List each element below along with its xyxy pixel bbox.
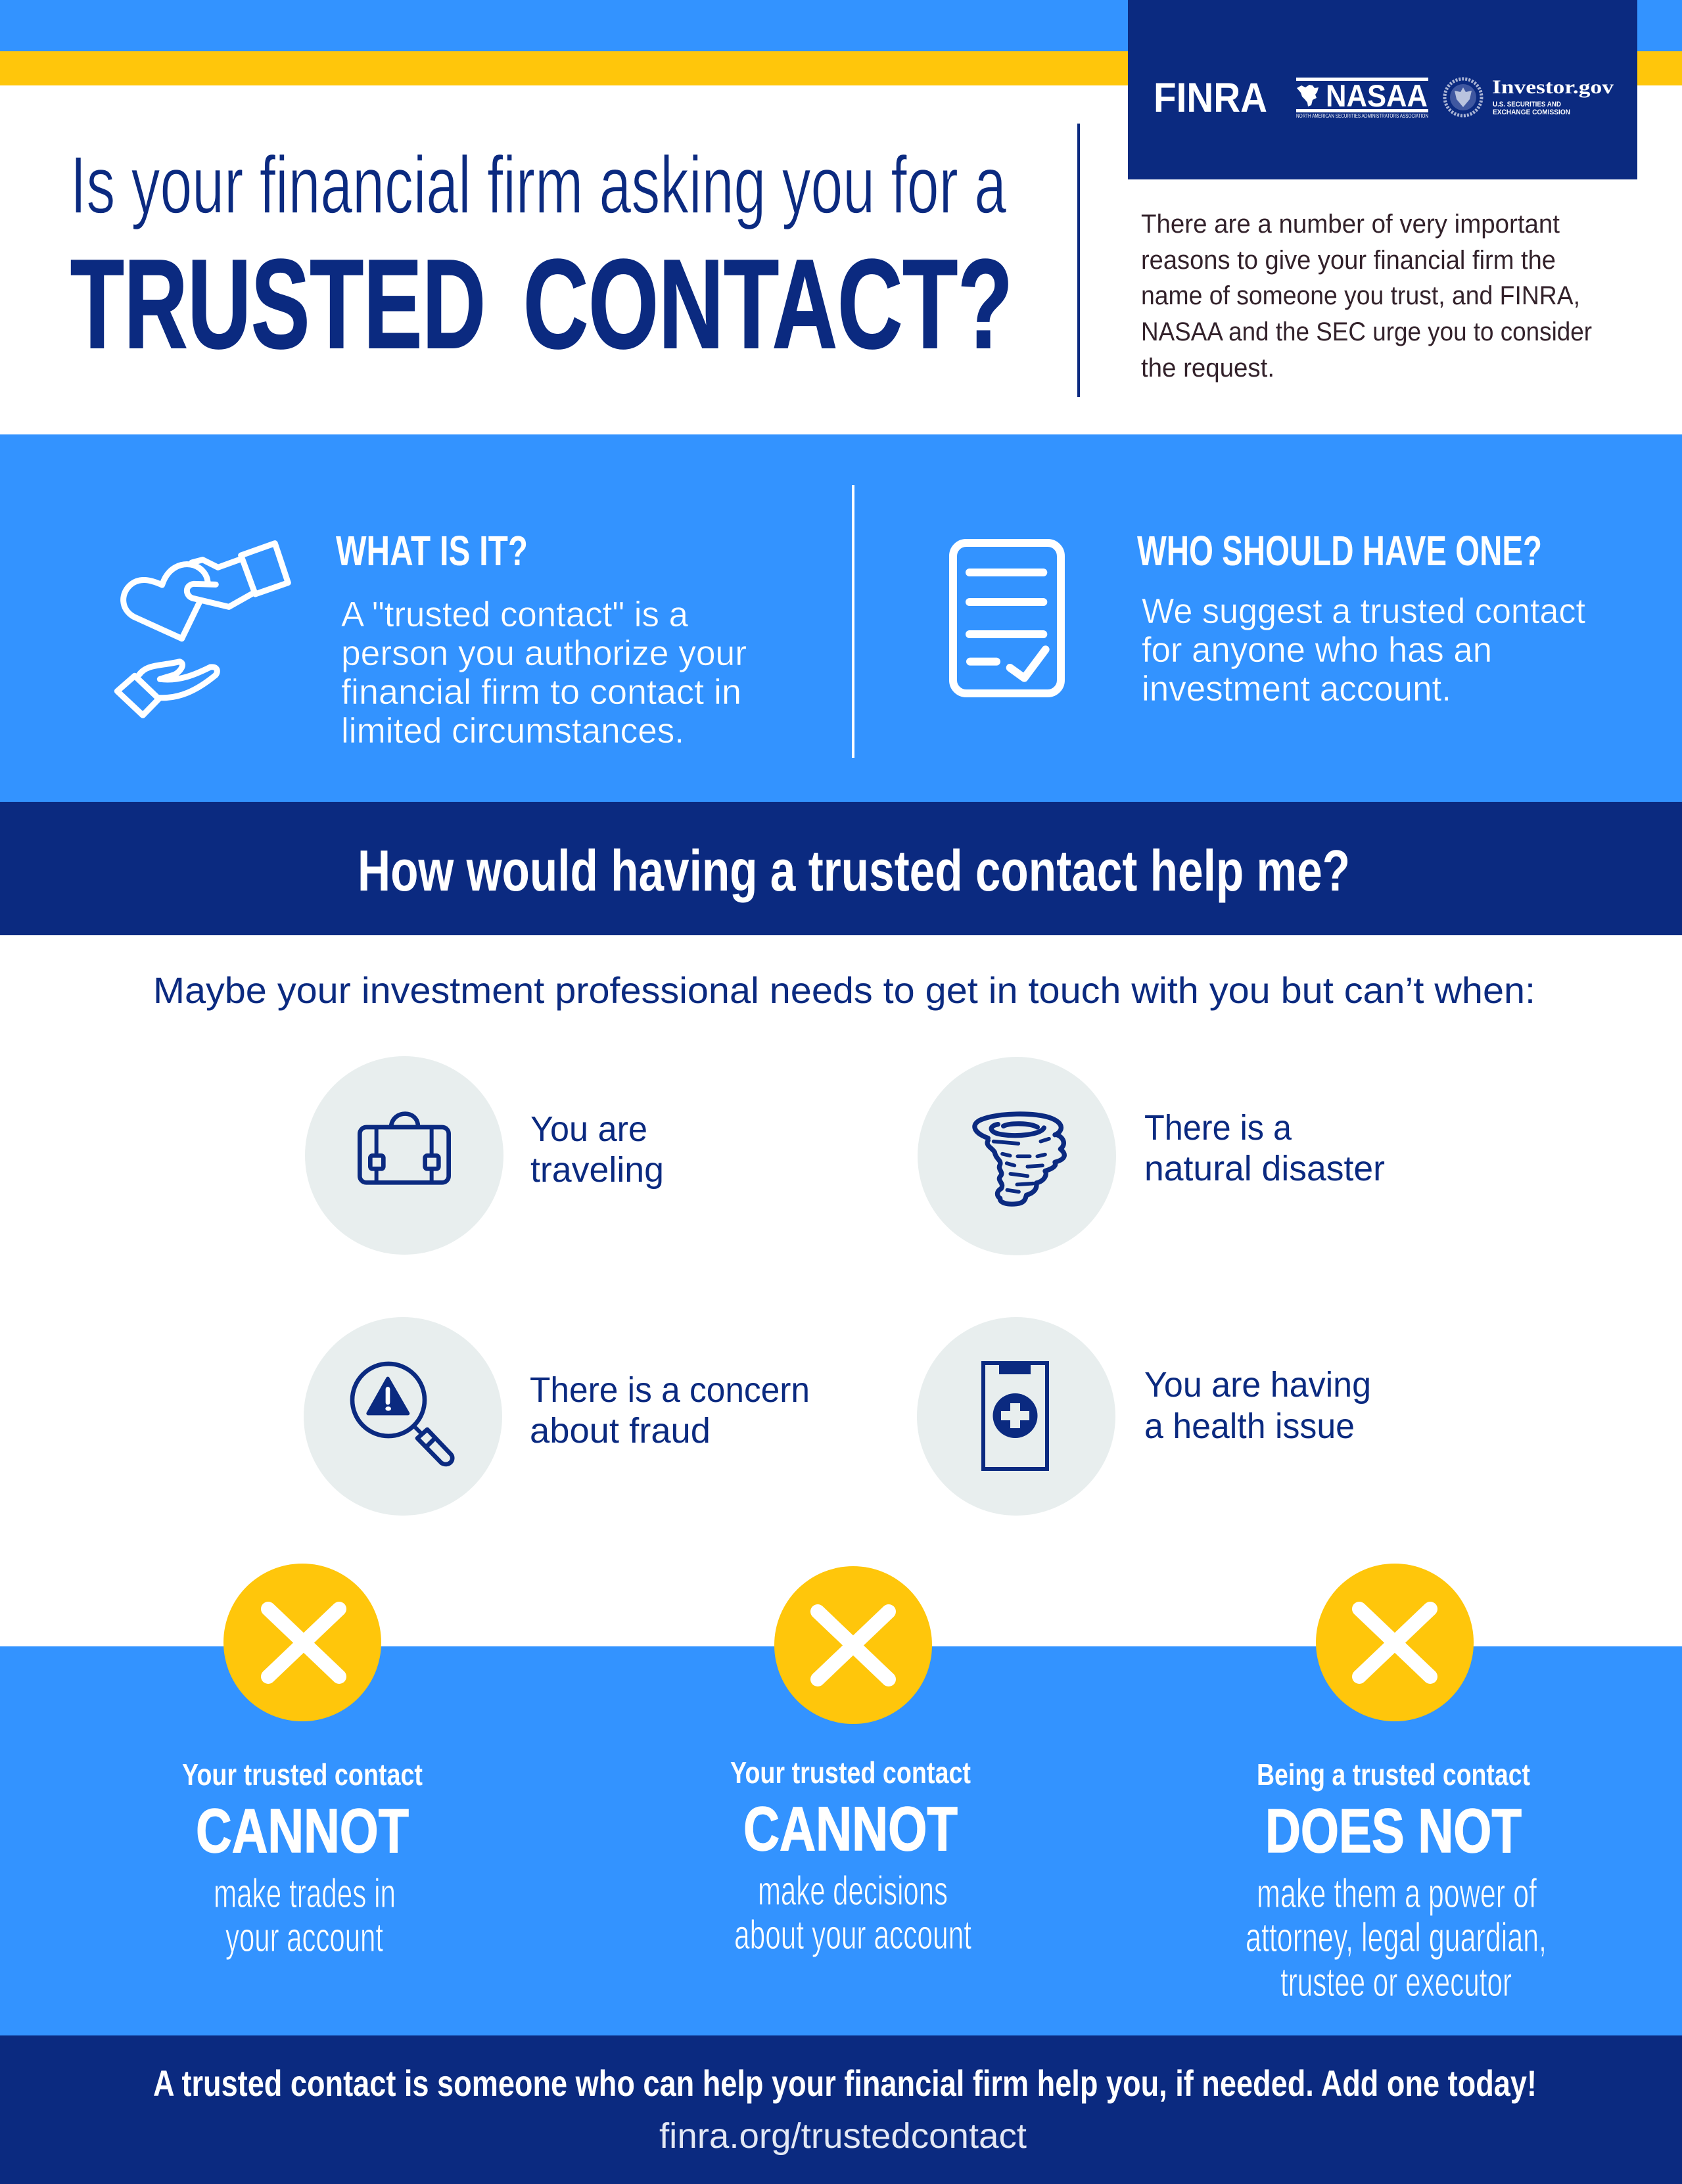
text block: who should have one <box>1137 527 1585 709</box>
text: you are traveling <box>530 1109 664 1190</box>
text: health issue: a health issue <box>1144 1406 1355 1446</box>
column: does not make them power of attorney: Being a trusted contact <box>1257 1757 1530 1792</box>
intro paragraph: There are a number of very important <box>1141 210 1560 239</box>
text: health issue: You are having <box>1144 1365 1371 1405</box>
footer url: finra.org/trustedcontact <box>659 2116 1027 2156</box>
text block: what is it: limited circumstances. <box>341 711 684 751</box>
column: cannot make decisions: Your trusted contact <box>730 1755 971 1790</box>
icon: tornado <box>975 1114 1064 1204</box>
text block: what is it: financial firm to contact in <box>341 672 741 712</box>
intro paragraph <box>1141 210 1592 383</box>
logo: NASAA: NASAA <box>1326 78 1428 113</box>
text: natural disaster: There is a <box>1144 1108 1292 1148</box>
header divider <box>1077 124 1080 397</box>
intro paragraph: reasons to give your financial firm the <box>1141 246 1556 275</box>
logo: FINRA: FINRA <box>1154 75 1267 121</box>
icon: checklist document <box>953 543 1061 693</box>
text block: what is it <box>336 527 747 751</box>
panel: what is it / who should have one <box>0 434 1682 802</box>
logo: Investor.gov <box>1492 76 1614 116</box>
logo: NASAA: NORTH AMERICAN SECURITIES ADMINISTRATORS ASSOCIATION <box>1296 113 1428 119</box>
text block: what is it: A "trusted contact" is a <box>341 595 689 634</box>
title: CONTACT? <box>523 233 1013 375</box>
column: cannot make trades <box>182 1564 423 1961</box>
intro paragraph: name of someone you trust, and FINRA, <box>1141 281 1580 310</box>
logo: NASAA <box>1296 78 1428 119</box>
heading band: how would it help <box>0 802 1682 935</box>
column: cannot make trades: CANNOT <box>196 1796 409 1866</box>
text: natural disaster: natural disaster <box>1144 1149 1385 1188</box>
column: cannot make decisions: CANNOT <box>743 1794 958 1864</box>
column: cannot make trades: Your trusted contact <box>182 1757 423 1792</box>
logo: Investor.gov: Investor.gov <box>1492 76 1614 98</box>
intro paragraph: NASAA and the SEC urge you to consider <box>1141 317 1592 346</box>
icon: yellow x <box>1316 1564 1474 1721</box>
title: Is your financial firm asking you for a <box>70 141 1006 231</box>
item: natural disaster <box>918 1057 1385 1255</box>
title: TRUSTED <box>70 233 486 375</box>
logo: Investor.gov: EXCHANGE COMISSION <box>1493 108 1570 116</box>
text: you are traveling: You are <box>530 1109 647 1149</box>
text: you are traveling: traveling <box>530 1150 664 1190</box>
icon: magnifier with warning <box>352 1364 452 1464</box>
text block: who should have one: for anyone who has an <box>1142 630 1492 670</box>
title <box>70 141 1013 375</box>
item: concern about fraud <box>304 1317 810 1516</box>
intro paragraph: the request. <box>1141 354 1274 383</box>
logo: Investor.gov: U.S. SECURITIES AND <box>1493 101 1561 108</box>
text: concern about fraud: about fraud <box>530 1411 711 1451</box>
column: does not make them power of attorney <box>1246 1564 1547 2005</box>
icon: briefcase <box>360 1114 449 1182</box>
item: traveling <box>305 1056 664 1255</box>
icon: hands passing a heart <box>117 544 288 715</box>
column: cannot make decisions: about your account <box>734 1913 971 1958</box>
heading band: how would it help: How would having a trusted contact help me? <box>358 838 1350 903</box>
column: cannot make trades: make trades in <box>214 1871 396 1917</box>
top header bands <box>0 0 1682 85</box>
text: health issue <box>1144 1365 1371 1446</box>
column: cannot make decisions <box>730 1566 971 1958</box>
logo: SEC seal <box>1445 79 1482 116</box>
text block: who should have one: investment account. <box>1142 669 1451 709</box>
column: does not make them power of attorney: attorney, legal guardian, <box>1246 1915 1547 1961</box>
text block: what is it: WHAT IS IT? <box>336 527 528 574</box>
column: does not make them power of attorney: trustee or executor <box>1280 1960 1512 2005</box>
text block: who should have one: We suggest a trusted contact <box>1142 592 1585 631</box>
column: cannot make trades: your account <box>225 1915 383 1961</box>
lead-in sentence: Maybe your investment professional needs to get in touch with you but can’t when: <box>153 969 1535 1011</box>
text block: who should have one: WHO SHOULD HAVE ONE? <box>1137 527 1542 574</box>
panel: limits of a trusted contact <box>0 1564 1682 2036</box>
icon: yellow x <box>774 1566 932 1724</box>
item: health issue <box>917 1317 1371 1516</box>
icon: yellow x <box>223 1564 381 1721</box>
text block: what is it: person you authorize your <box>341 634 747 673</box>
logo panel <box>1128 0 1637 179</box>
column: does not make them power of attorney: make them a power of <box>1257 1871 1537 1917</box>
footer band <box>0 2035 1682 2184</box>
column: does not make them power of attorney: DOES NOT <box>1265 1796 1522 1866</box>
text: natural disaster <box>1144 1108 1385 1188</box>
column: cannot make decisions: make decisions <box>758 1869 948 1914</box>
icon: medical phone <box>983 1363 1047 1469</box>
text: concern about fraud: There is a concern <box>530 1370 810 1410</box>
text: concern about fraud <box>530 1370 810 1451</box>
